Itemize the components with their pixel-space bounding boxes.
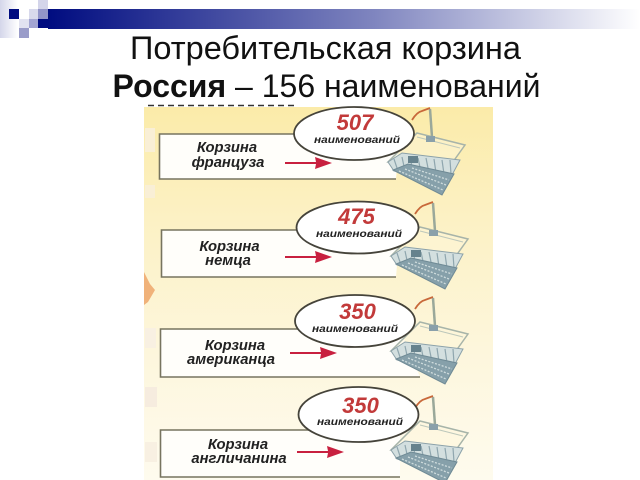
clipped caption remnant (148, 104, 298, 106)
panel: France (160, 107, 465, 195)
unit: Germany: наименований (316, 229, 402, 240)
label: USA: американца (187, 352, 275, 368)
label: Britain: англичанина (191, 451, 287, 467)
subtitle: Россия – 156 наименований (113, 68, 540, 104)
label: Germany: Корзина (199, 239, 260, 255)
panel: Germany (162, 202, 468, 289)
unit: USA: наименований (312, 324, 398, 335)
arrow: France (285, 157, 332, 169)
label: USA: Корзина (205, 338, 265, 354)
label box: Britain (160, 430, 400, 477)
basket: France (388, 108, 465, 195)
panel: USA (160, 295, 468, 384)
basket: Britain (391, 396, 468, 480)
number: 475: 475 (337, 204, 376, 229)
label: France: француза (192, 155, 264, 171)
panel: Britain (160, 387, 468, 480)
number: 507: 507 (337, 110, 375, 135)
unit: Britain: наименований (317, 417, 403, 428)
number: 350: 350 (342, 393, 380, 418)
basket: USA (391, 297, 468, 384)
label box: Germany (162, 230, 400, 277)
callout: Britain (298, 387, 418, 442)
left edge decorative tab (144, 272, 155, 305)
callout: France (294, 107, 414, 160)
arrow: Germany (285, 251, 332, 263)
basket: Germany (391, 202, 468, 289)
label box: France (160, 134, 400, 179)
label box: USA (160, 329, 420, 377)
callout: USA (295, 295, 415, 347)
arrow: USA (290, 347, 337, 359)
label: Britain: Корзина (208, 437, 268, 453)
infographic background (144, 107, 493, 480)
label: France: Корзина (197, 140, 257, 156)
decorative header bar (0, 0, 640, 38)
title: Потребительская корзина (130, 30, 522, 66)
label: Germany: немца (205, 253, 251, 269)
callout: Germany (296, 202, 418, 254)
unit: France: наименований (314, 135, 400, 146)
arrow: Britain (297, 446, 344, 458)
number: 350: 350 (339, 299, 377, 324)
